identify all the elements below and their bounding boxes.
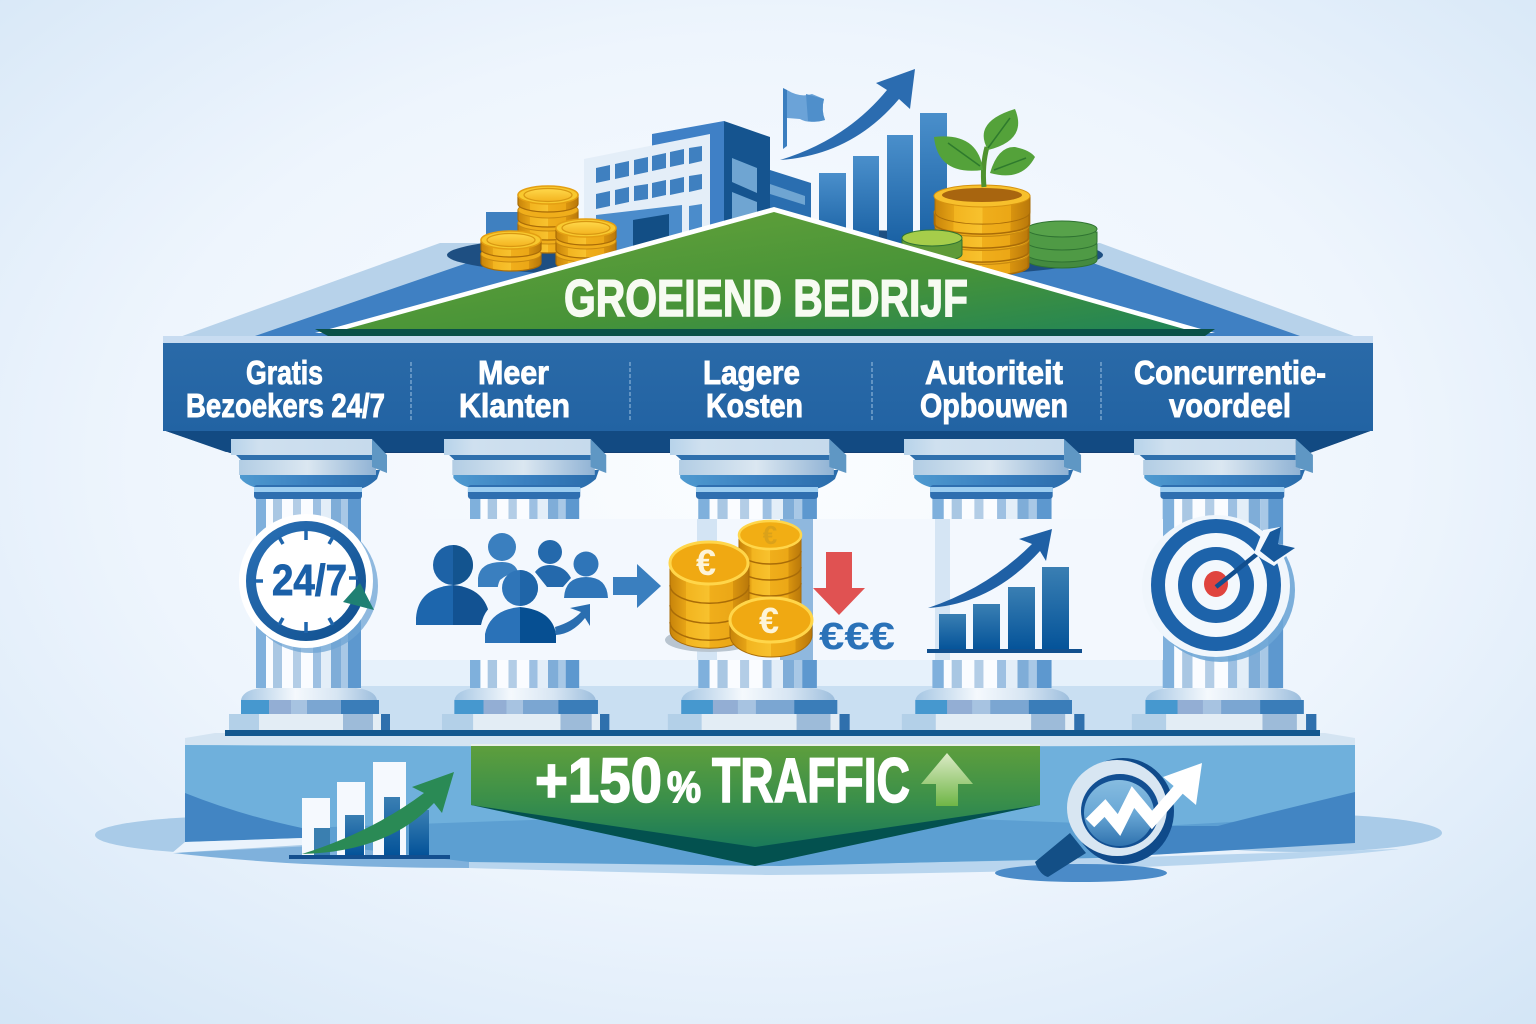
- label: Gratis Bezoekers 24/7: Gratis: [246, 354, 323, 391]
- coins and plant right: [902, 109, 1097, 276]
- label: Gratis Bezoekers 24/7: [186, 354, 385, 424]
- label: Autoriteit Opbouwen: Opbouwen: [920, 387, 1068, 424]
- icon: euro coins: €: [763, 520, 777, 550]
- icon: euro coins: [665, 520, 812, 657]
- headline: +150% traffic: +150: [535, 746, 662, 816]
- skyline: growth bars: [819, 113, 947, 263]
- label: Concurrentie-voordeel: voordeel: [1169, 387, 1291, 424]
- roof: [163, 243, 1373, 343]
- icon: target: [1142, 515, 1296, 662]
- icon: up arrow: [921, 753, 973, 806]
- skyline: building: [486, 121, 811, 250]
- headline: +150% traffic: TRAFFIC: [712, 746, 910, 816]
- green pediment: [315, 207, 1215, 336]
- label: Meer Klanten: Klanten: [459, 387, 570, 424]
- skyline: growth arrow: [780, 69, 915, 160]
- label: Autoriteit Opbouwen: Autoriteit: [925, 354, 1063, 391]
- label: Gratis Bezoekers 24/7: Bezoekers 24/7: [186, 387, 385, 424]
- column 2: [442, 439, 609, 730]
- headline: +150% traffic: %: [667, 763, 701, 812]
- column 3: [668, 439, 850, 730]
- skyline: flag: [783, 88, 825, 149]
- column 1: [229, 439, 390, 730]
- icon: magnifier: [995, 758, 1202, 882]
- label: Autoriteit Opbouwen: [920, 354, 1068, 424]
- label: Meer Klanten: Meer: [478, 354, 549, 391]
- label: Lagere Kosten: Kosten: [706, 387, 803, 424]
- rooftop platform: [447, 229, 1103, 281]
- icon: bar chart with arrow: [289, 762, 454, 859]
- column 5: [1132, 439, 1316, 730]
- icon: growth chart: [927, 529, 1082, 653]
- label: Lagere Kosten: [703, 354, 803, 424]
- ground shadows: [95, 814, 1442, 875]
- icon band: [361, 519, 1163, 660]
- heading: Groeiend bedrijf: GROEIEND BEDRIJF: [564, 270, 968, 328]
- icon: euro coins: €: [759, 600, 779, 641]
- icon: 24/7 clock: [239, 514, 378, 653]
- label: Concurrentie-voordeel: [1134, 354, 1326, 424]
- label: Meer Klanten: [459, 354, 570, 424]
- column 4: [902, 439, 1084, 730]
- icon: 24/7 clock: 24/7: [272, 556, 347, 605]
- icon: customers: [416, 533, 608, 645]
- coins left: [481, 186, 616, 271]
- top beam: [163, 336, 1373, 453]
- icon: euro coins: €: [696, 542, 716, 583]
- base platform: [172, 733, 1355, 866]
- arrow: customers to coins: [613, 564, 661, 608]
- headline: +150% traffic: [535, 746, 910, 816]
- floor behind columns: [361, 660, 1163, 732]
- euro signs: €€€: [819, 616, 895, 658]
- label: Lagere Kosten: Lagere: [703, 354, 800, 391]
- label: Concurrentie-voordeel: Concurrentie-: [1134, 354, 1326, 391]
- traffic banner: [471, 744, 1040, 866]
- icon: down arrow: [813, 552, 865, 615]
- plinth line: [225, 730, 1320, 736]
